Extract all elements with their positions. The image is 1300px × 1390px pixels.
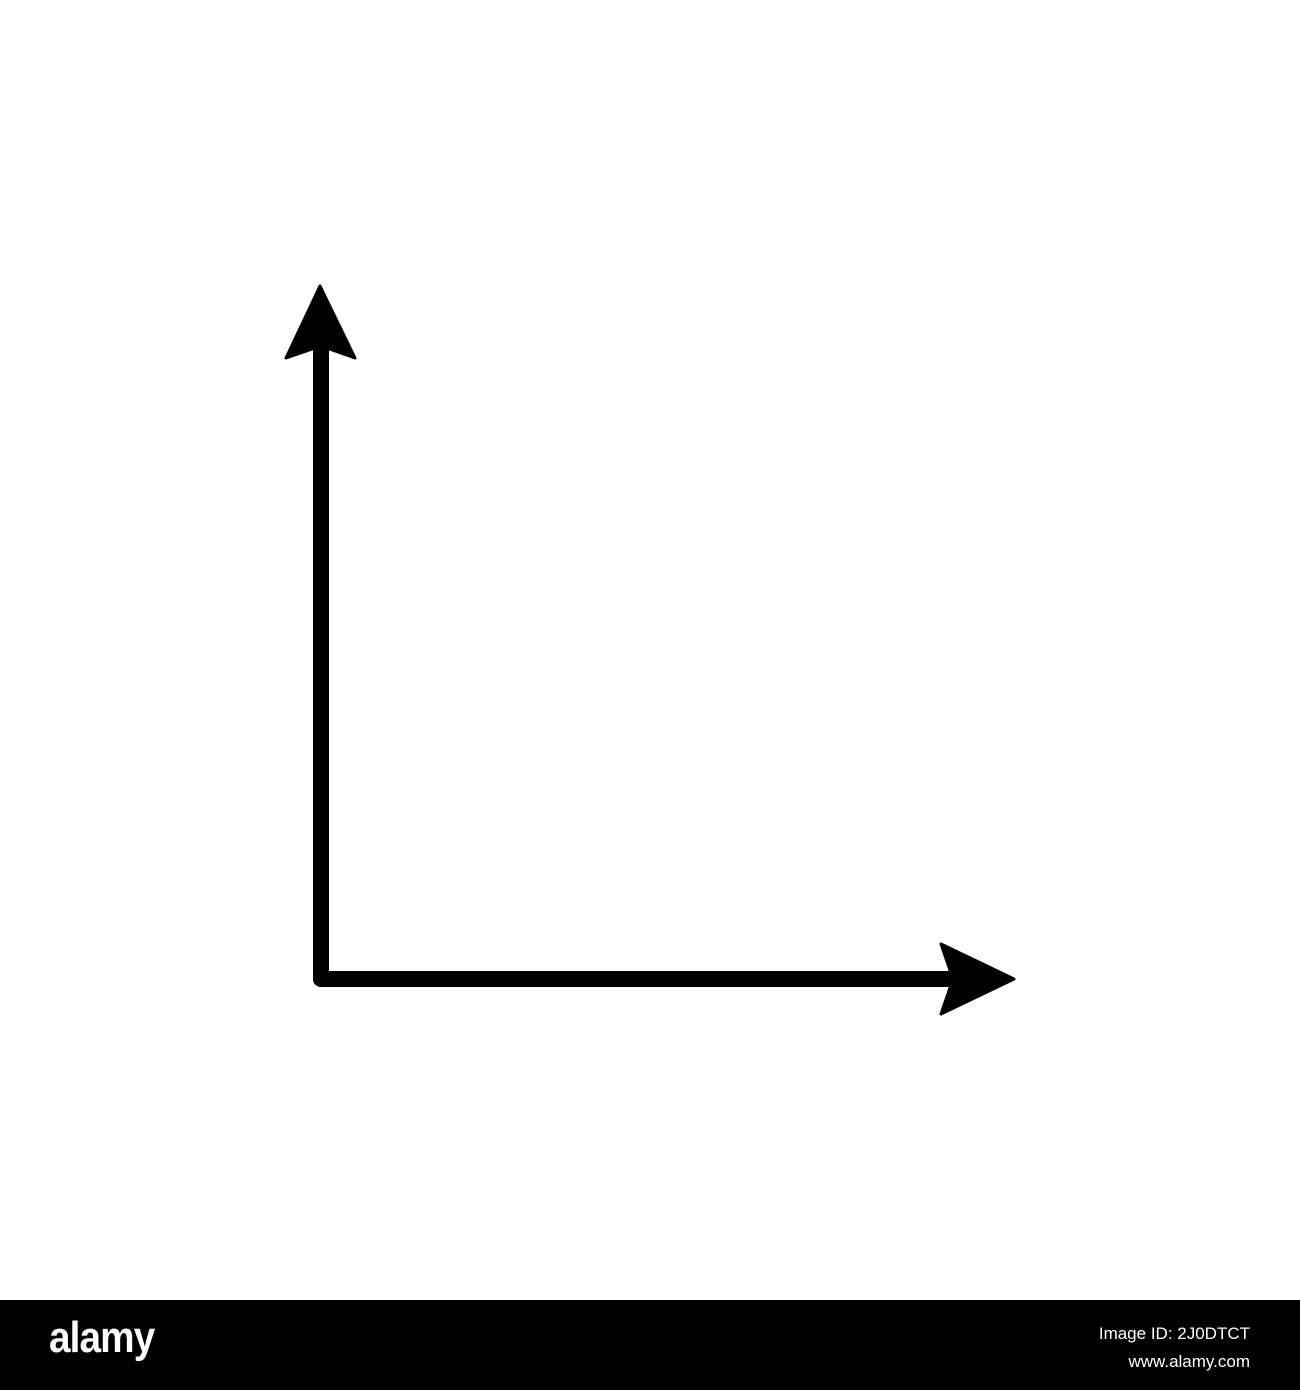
- image id text: www.alamy.com: [1128, 1352, 1250, 1371]
- footer bar: [0, 1300, 1300, 1390]
- axis: horizontal with arrow: [321, 944, 1014, 1014]
- image id text: [1099, 1324, 1250, 1371]
- logo text: alamy: [49, 1313, 154, 1362]
- image id text: Image ID: 2J0DTCT: [1099, 1324, 1250, 1343]
- axis: vertical with arrow: [286, 286, 355, 979]
